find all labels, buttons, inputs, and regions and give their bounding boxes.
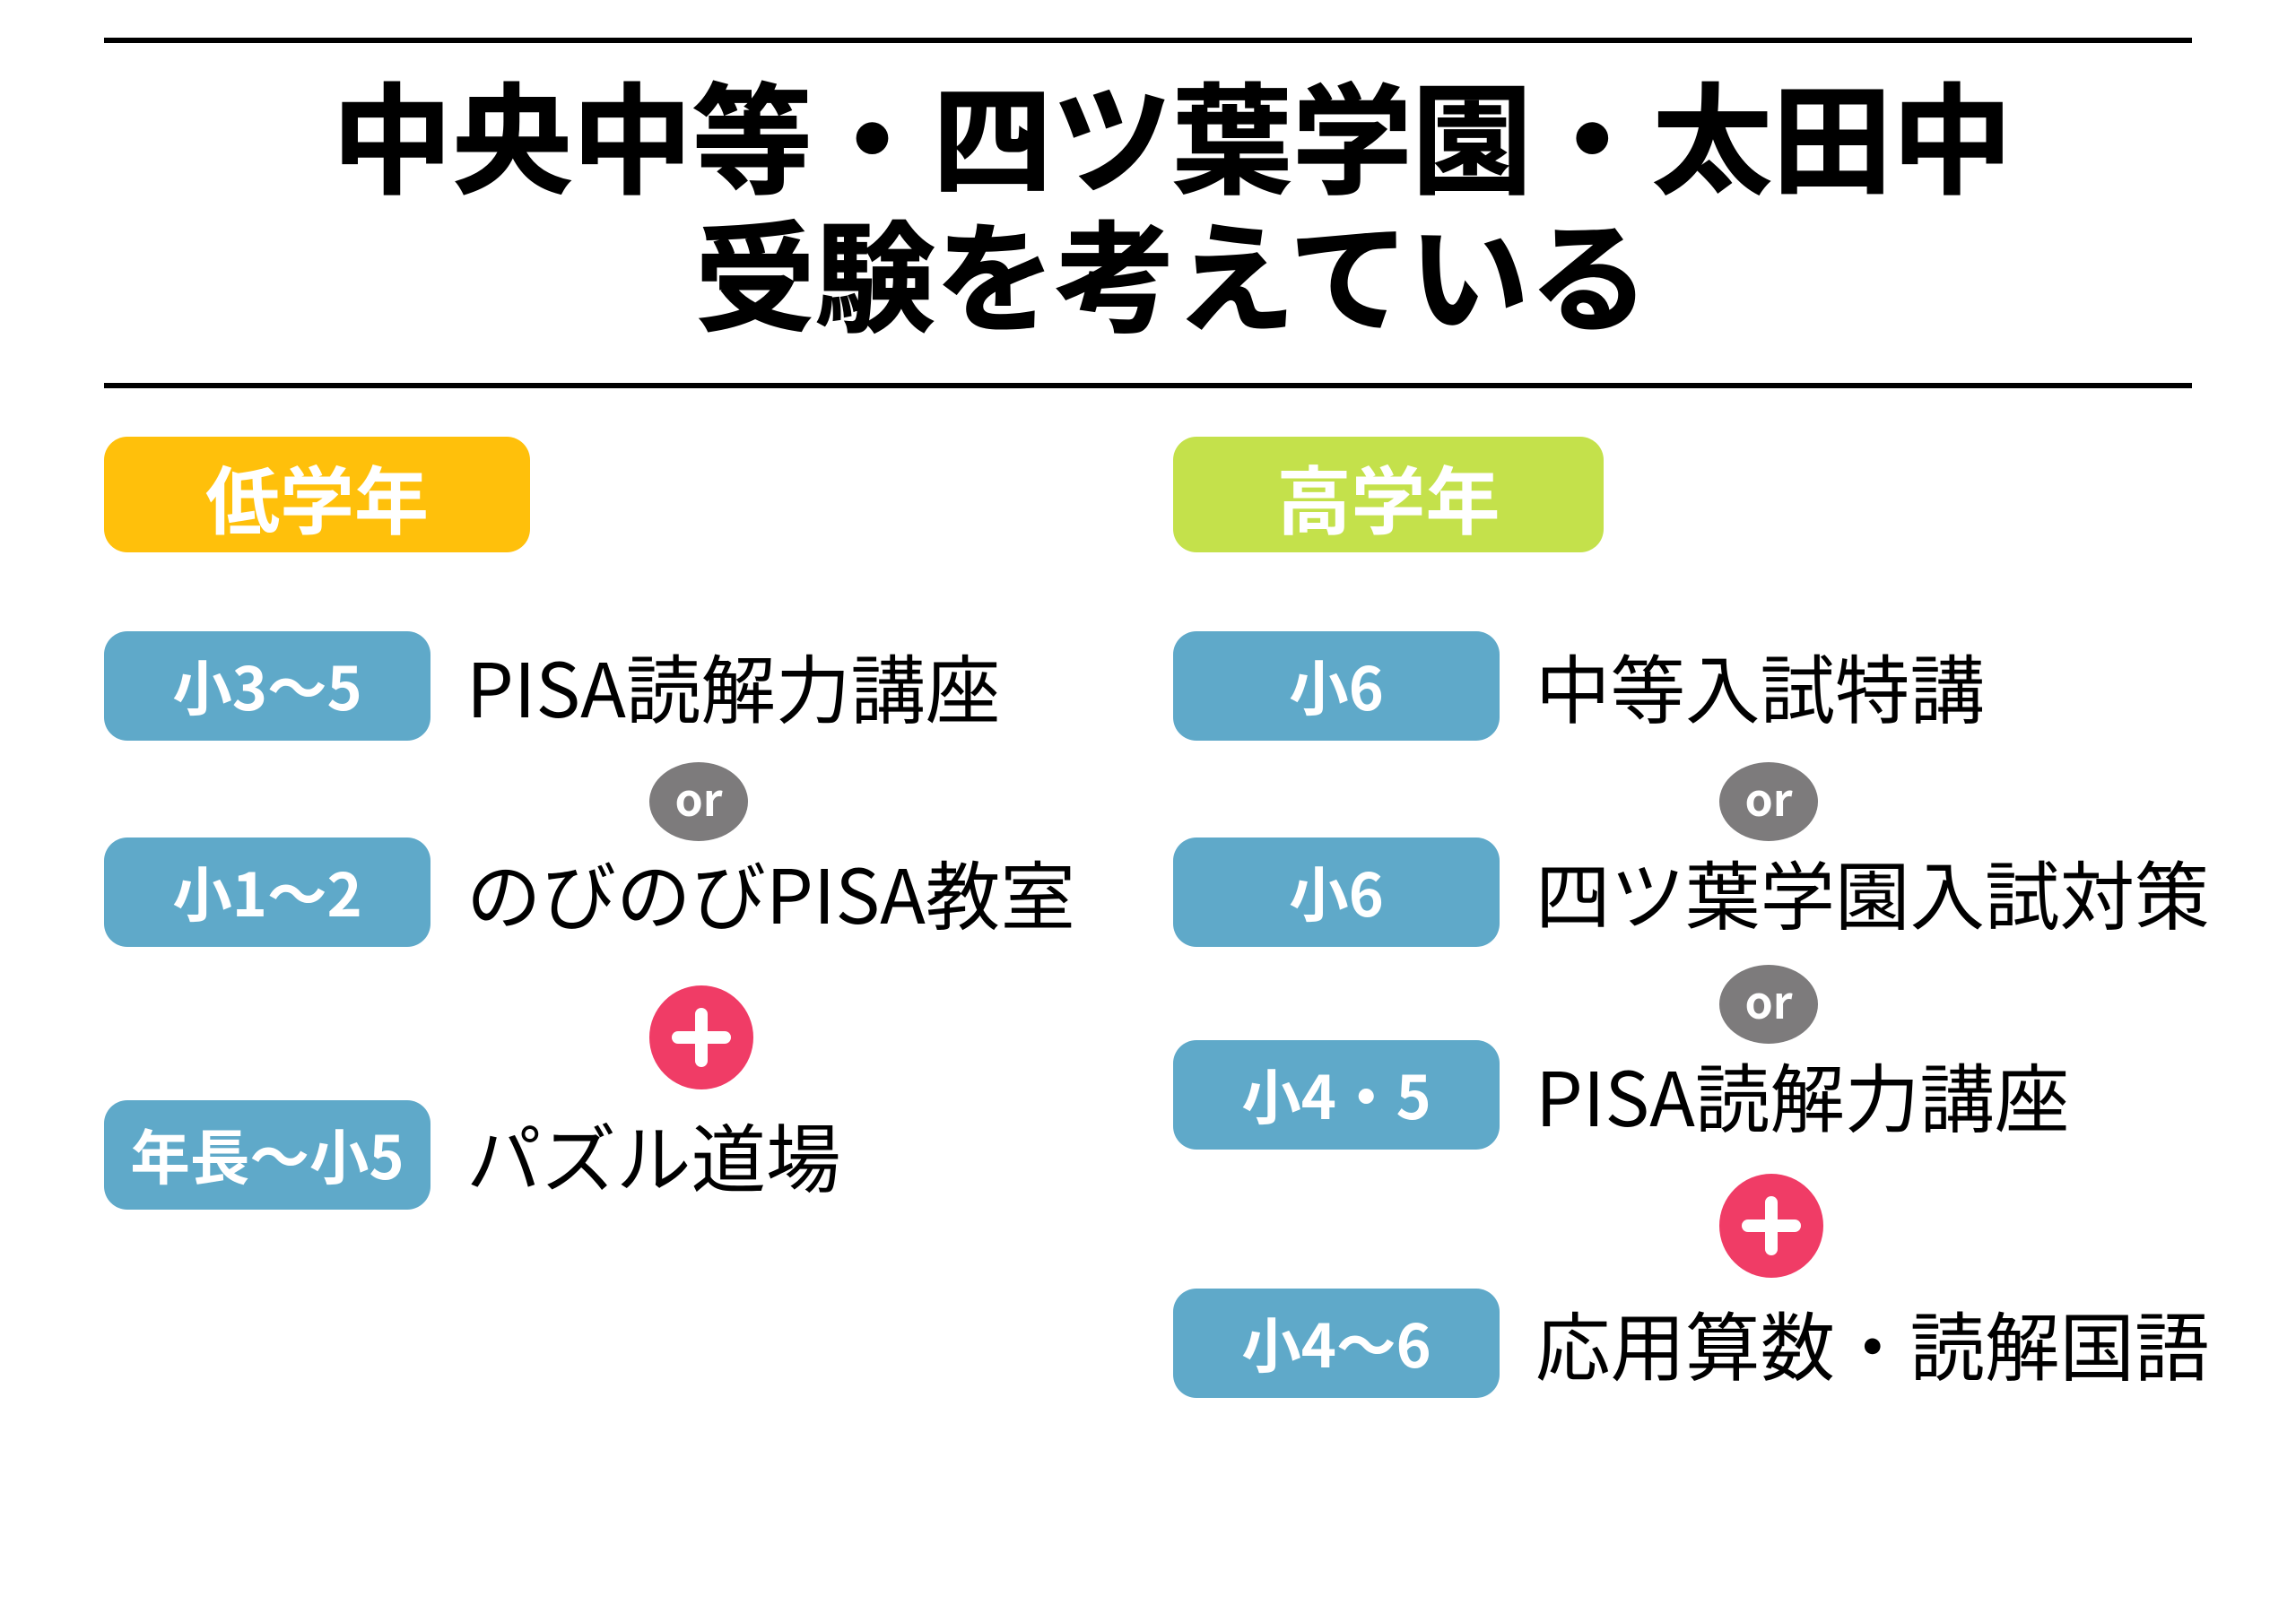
grade badge: 小6	[1173, 838, 1500, 947]
course: 応用算数・読解国語: 応用算数・読解国語	[1535, 1289, 2210, 1397]
panel: lower grades	[104, 437, 1075, 1210]
heading: upper grades: 高学年	[1277, 442, 1500, 550]
or badge: or	[1744, 968, 1793, 1032]
grade badge: 年長〜小5: 年長〜小5	[130, 1111, 404, 1197]
or badge	[649, 762, 748, 841]
title: 中央中等・四ツ葉学園・太田中	[332, 45, 2013, 219]
grade badge: 年長〜小5	[104, 1100, 430, 1210]
course: のびのびPISA教室: のびのびPISA教室	[466, 838, 1075, 946]
grade badge: 小6	[1173, 631, 1500, 741]
icon: plus	[649, 985, 753, 1089]
grade badge: 小3〜5	[104, 631, 430, 741]
bottom rule	[104, 383, 2192, 388]
heading: upper grades	[1173, 437, 1604, 552]
heading: lower grades	[104, 437, 530, 552]
panel: upper grades	[1173, 437, 2210, 1398]
or badge	[1719, 762, 1818, 841]
grade badge: 小4〜6: 小4〜6	[1241, 1299, 1431, 1385]
or badge: or	[674, 765, 723, 829]
or badge	[1719, 965, 1818, 1044]
course: PISA読解力講座: PISA読解力講座	[1535, 1040, 2069, 1149]
grade badge: 小6: 小6	[1289, 848, 1384, 934]
course: パズル道場: パズル道場	[466, 1100, 841, 1209]
grade badge: 小4・5: 小4・5	[1241, 1051, 1431, 1137]
heading: lower grades: 低学年	[205, 442, 429, 550]
grade badge: 小1〜2	[104, 838, 430, 947]
course: PISA読解力講座: PISA読解力講座	[466, 631, 1000, 740]
top rule	[104, 38, 2192, 43]
grade badge: 小4・5	[1173, 1040, 1500, 1150]
title	[332, 45, 2013, 357]
course: 中等入試特講: 中等入試特講	[1535, 631, 1985, 740]
course: 四ツ葉学園入試対策: 四ツ葉学園入試対策	[1535, 838, 2210, 946]
grade badge: 小4〜6	[1173, 1289, 1500, 1398]
grade badge: 小3〜5: 小3〜5	[172, 642, 362, 728]
icon: plus	[1719, 1174, 1823, 1278]
grade badge: 小6: 小6	[1289, 642, 1384, 728]
grade badge: 小1〜2: 小1〜2	[172, 848, 362, 934]
or badge: or	[1744, 765, 1793, 829]
title: 受験を考えている	[695, 183, 1649, 357]
